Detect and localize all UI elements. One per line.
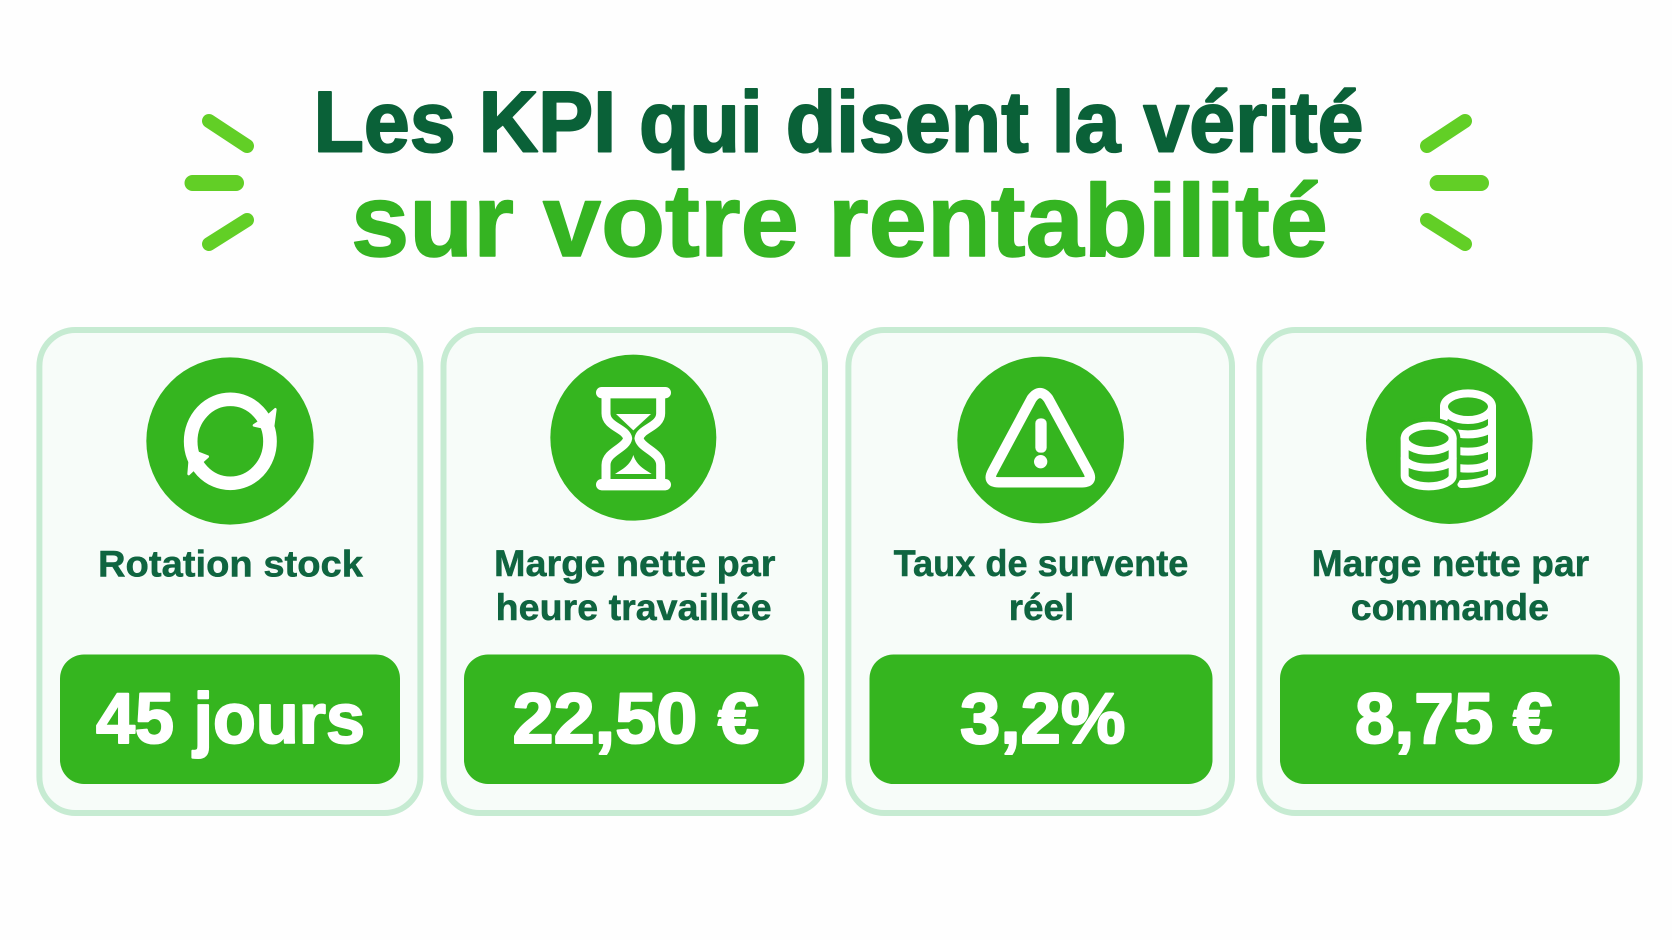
panel: Taux de survente réel bbox=[848, 330, 1232, 813]
panel: Rotation stock bbox=[39, 330, 420, 813]
value pill bbox=[464, 654, 804, 784]
value pill bbox=[870, 654, 1212, 784]
value pill: 3,2% bbox=[960, 680, 1126, 759]
icon: rotation arrows bbox=[146, 357, 314, 525]
value pill bbox=[1280, 654, 1620, 784]
icon: right sparkle accent bbox=[1427, 121, 1481, 244]
icon: coin stacks bbox=[1366, 357, 1533, 524]
value pill: 22,50 € bbox=[512, 680, 759, 759]
KPI label: Rotation stock bbox=[98, 544, 363, 584]
value pill: 45 jours bbox=[96, 680, 365, 759]
icon: warning triangle bbox=[957, 357, 1124, 523]
card background bbox=[444, 330, 825, 813]
value pill bbox=[60, 654, 400, 784]
card background bbox=[848, 330, 1232, 813]
icon: left sparkle accent bbox=[192, 121, 247, 244]
KPI label: commande bbox=[1351, 587, 1549, 628]
icon: hourglass bbox=[550, 355, 716, 521]
KPI label: Marge nette par bbox=[494, 543, 776, 584]
title bbox=[314, 74, 1364, 278]
KPI label: heure travaillée bbox=[496, 587, 772, 628]
card background bbox=[1259, 330, 1640, 813]
KPI label bbox=[894, 543, 1188, 628]
KPI label: Marge nette par bbox=[1312, 543, 1589, 584]
title line 2: sur votre rentabilité bbox=[351, 163, 1328, 278]
card background bbox=[39, 330, 420, 813]
KPI label bbox=[1312, 543, 1589, 628]
KPI label bbox=[494, 543, 776, 628]
value pill: 8,75 € bbox=[1355, 680, 1552, 759]
title line 1: Les KPI qui disent la vérité bbox=[314, 74, 1364, 170]
KPI label: Taux de survente bbox=[894, 543, 1188, 584]
KPI label: réel bbox=[1009, 587, 1074, 628]
panel: Marge nette par commande bbox=[1259, 330, 1640, 813]
panel: Marge nette par heure travaillée bbox=[444, 330, 825, 813]
